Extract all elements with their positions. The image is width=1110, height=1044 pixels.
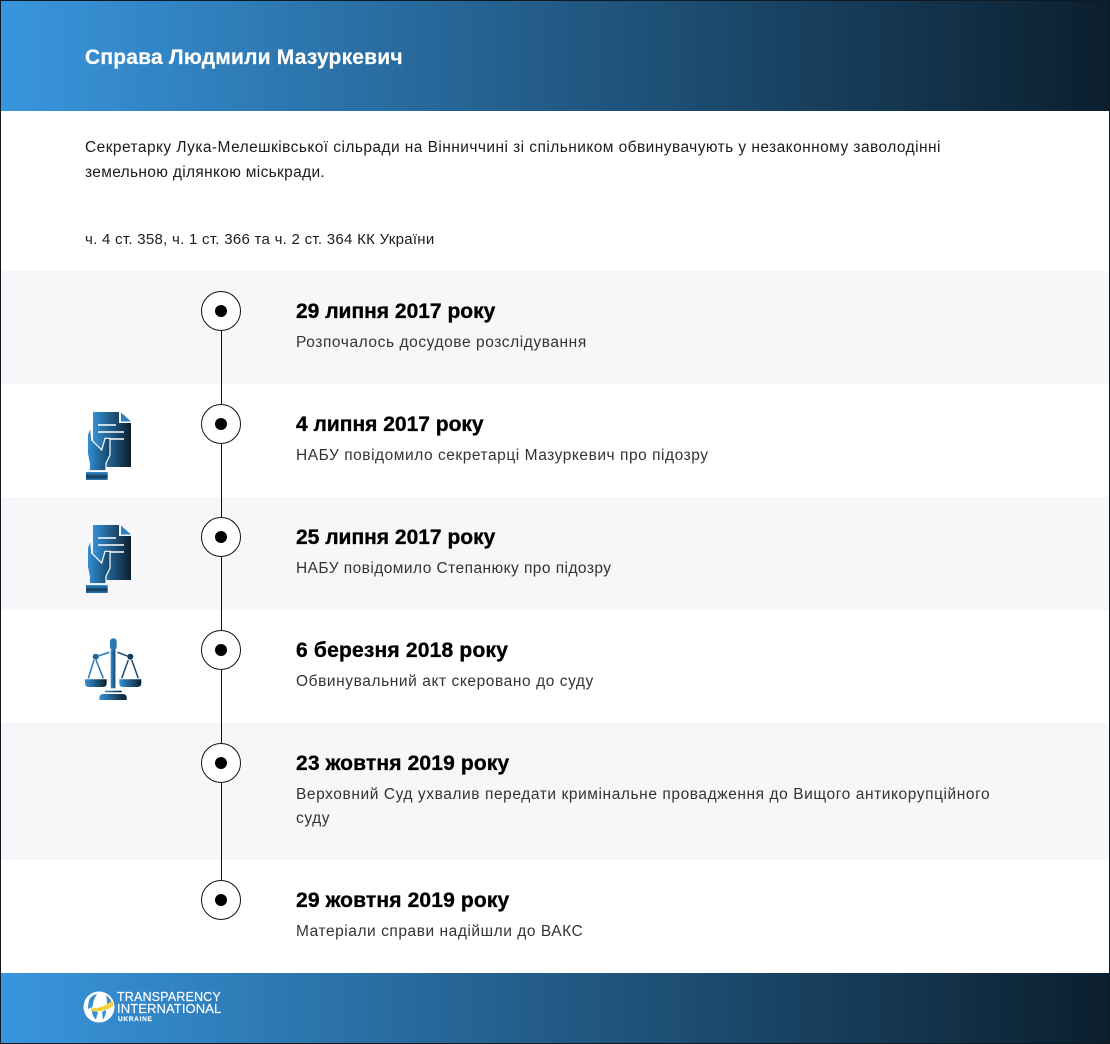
case description: Секретарку Лука-Мелешківської сільради на Вінниччині зі спільником обвинувачують у незаконному заволодінні — [85, 139, 941, 156]
row background 1 — [0, 271, 1110, 384]
logo emblem — [84, 992, 114, 1022]
event 5 marker — [201, 743, 241, 783]
logo: Transparency International Ukraine — [84, 990, 221, 1022]
event 2 description: НАБУ повідомило секретарці Мазуркевич про підозру — [296, 447, 709, 464]
event 1 date: 29 липня 2017 року — [296, 300, 495, 323]
event 3 date: 25 липня 2017 року — [296, 526, 495, 549]
logo wordmark — [117, 990, 221, 1022]
event 1 marker — [201, 291, 241, 331]
case description — [85, 139, 941, 181]
event 6 date: 29 жовтня 2019 року — [296, 889, 509, 912]
row background 5 — [0, 723, 1110, 860]
icon: hand holding document — [86, 412, 131, 480]
event 4 marker — [201, 630, 241, 670]
event 3 description: НАБУ повідомило Степанюку про підозру — [296, 560, 612, 577]
event 4 date: 6 березня 2018 року — [296, 639, 508, 662]
row background 3 — [0, 497, 1110, 610]
header banner — [0, 0, 1110, 111]
footer banner — [0, 973, 1110, 1044]
icon: scales of justice — [85, 638, 142, 700]
event 5 description — [296, 786, 990, 827]
logo wordmark: INTERNATIONAL — [117, 1001, 221, 1016]
event 6 description: Матеріали справи надійшли до ВАКС — [296, 923, 583, 940]
event 3 marker — [201, 517, 241, 557]
logo wordmark: TRANSPARENCY — [117, 990, 221, 1004]
event 2 marker — [201, 404, 241, 444]
event 5 description: Верховний Суд ухвалив передати кримінальне провадження до Вищого антикорупційного — [296, 786, 990, 803]
icon: hand holding document — [86, 525, 131, 593]
criminal code articles: ч. 4 ст. 358, ч. 1 ст. 366 та ч. 2 ст. 364 КК України — [85, 231, 434, 248]
case description: земельною ділянкою міськради. — [85, 164, 325, 181]
event 5 description: суду — [296, 810, 330, 827]
logo wordmark: UKRAINE — [118, 1016, 153, 1022]
timeline line — [220, 311, 222, 901]
event 1 description: Розпочалось досудове розслідування — [296, 334, 587, 351]
title: Справа Людмили Мазуркевич — [85, 46, 403, 69]
event 2 date: 4 липня 2017 року — [296, 413, 484, 436]
event 6 marker — [201, 880, 241, 920]
event 5 date: 23 жовтня 2019 року — [296, 752, 509, 775]
event 4 description: Обвинувальний акт скеровано до суду — [296, 673, 594, 690]
